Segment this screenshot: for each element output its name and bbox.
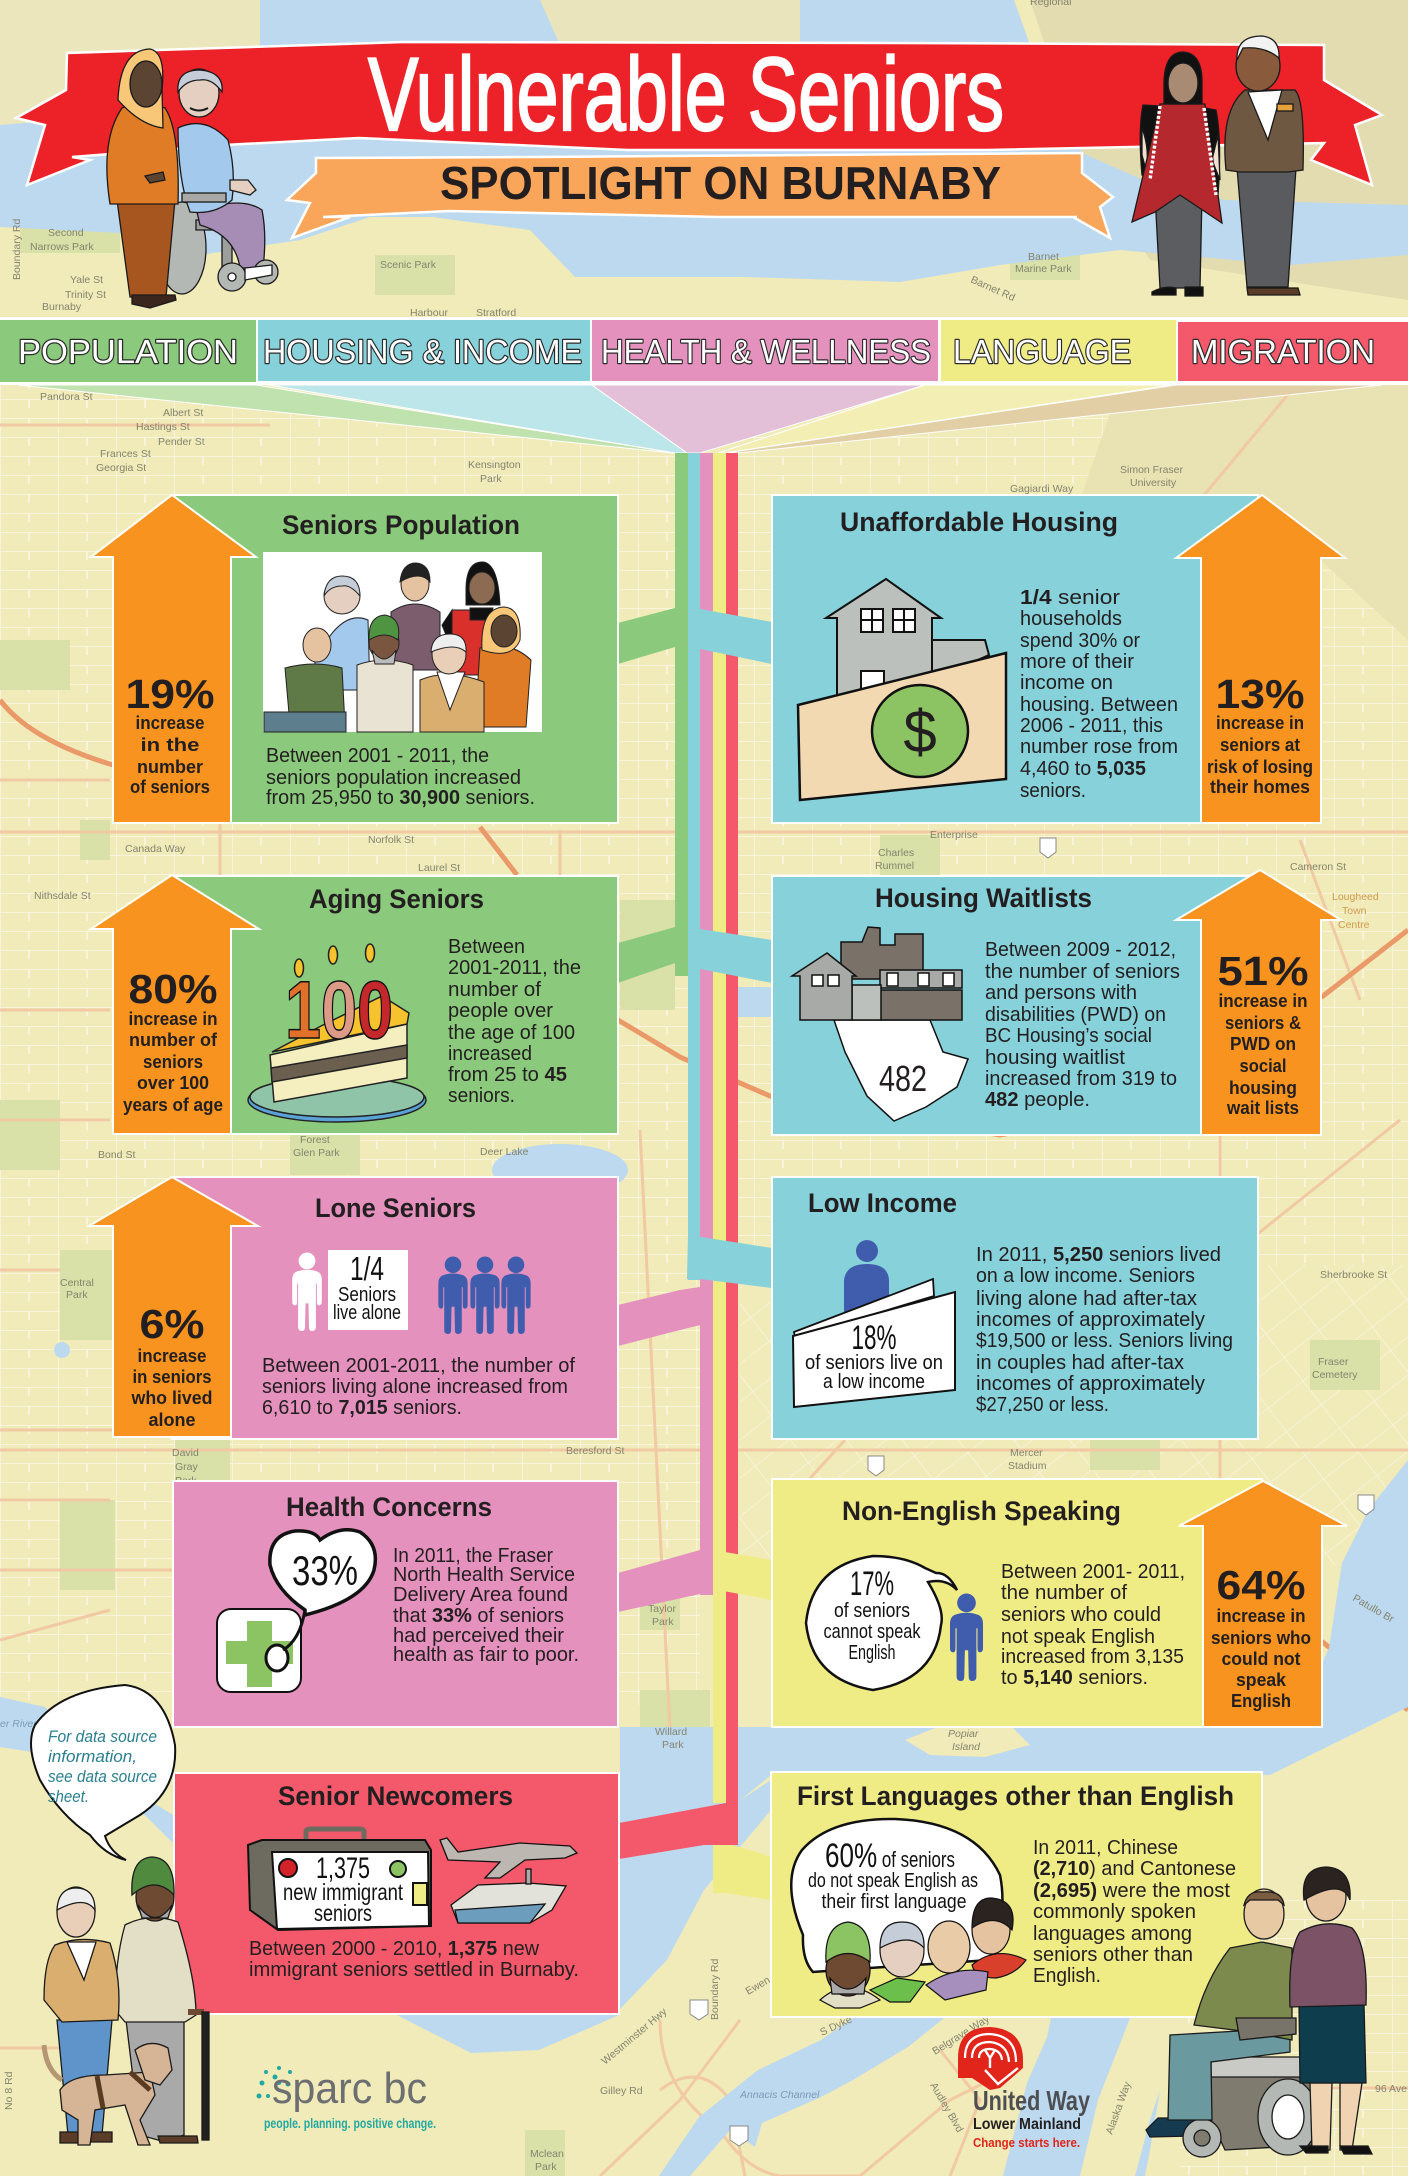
map labels: Lougheed xyxy=(1332,891,1379,903)
tab: population xyxy=(0,320,256,382)
map labels: Sherbrooke St xyxy=(1320,1269,1387,1281)
map labels: Barnet Rd xyxy=(969,274,1017,304)
timeline columns xyxy=(675,453,738,1845)
map labels: Gray xyxy=(175,1461,199,1473)
body text: seniors. xyxy=(448,1084,515,1107)
body text: increased from 319 to xyxy=(985,1067,1177,1090)
icon: person with wallet xyxy=(793,1240,955,1407)
body text: (2,695) were the most xyxy=(1033,1879,1230,1902)
body text xyxy=(266,744,535,809)
arrow stat: 19%: 19% xyxy=(126,671,214,717)
map labels: Barnet xyxy=(1028,251,1059,263)
map labels: Georgia St xyxy=(96,462,146,474)
panel: low income xyxy=(772,1177,1258,1439)
tab: migration: MIGRATION xyxy=(1191,333,1375,370)
body text: income on xyxy=(1020,671,1113,694)
arrow stat: 6%: in seniors xyxy=(132,1366,212,1387)
body text: number of xyxy=(448,978,541,1001)
logo: sparc bc: people. planning. positive change. xyxy=(264,2115,436,2131)
body text: increased xyxy=(448,1042,532,1065)
body text: In 2011, 5,250 seniors lived xyxy=(976,1243,1221,1266)
map labels: Stratford xyxy=(476,307,516,319)
arrow stat: 6%: increase xyxy=(138,1345,206,1366)
icon: buildings and waitlist paper xyxy=(792,927,968,1121)
body text: 2001-2011, the xyxy=(448,956,581,979)
panel: housing waitlists xyxy=(772,876,1258,1135)
arrow stat: 80%: increase in xyxy=(128,1008,218,1029)
map labels: Nithsdale St xyxy=(34,890,91,902)
illustration: birthday cake: 100 xyxy=(285,965,393,1056)
heading: Senior Newcomers xyxy=(278,1781,513,1811)
map labels: Annacis Channel xyxy=(739,2089,820,2101)
tab: health and wellness: HEALTH & WELLNESS xyxy=(601,333,931,370)
figure: woman in wheelchair xyxy=(158,69,278,294)
arrow stat: 13%: 13% xyxy=(1216,671,1304,717)
map labels: Trinity St xyxy=(65,289,106,301)
map labels: Enterprise xyxy=(930,829,978,841)
map labels: Taylor xyxy=(648,1603,677,1615)
map labels: Island xyxy=(952,1741,981,1753)
highway xyxy=(0,700,1408,1710)
arrow stat: 19% xyxy=(91,495,256,823)
callout: 60% speech bubble with faces xyxy=(791,1819,1026,2008)
arrow stat: 64%: English xyxy=(1231,1690,1291,1711)
map labels: Norfolk St xyxy=(368,834,414,846)
map labels: Canada Way xyxy=(125,843,186,855)
heading: Seniors Population xyxy=(282,510,520,540)
panel: seniors population xyxy=(172,495,618,823)
map labels: S Dyke xyxy=(818,2013,854,2039)
body text: seniors. xyxy=(1020,779,1086,802)
body text xyxy=(976,1243,1233,1416)
map labels: Central xyxy=(60,1277,94,1289)
heading: Health Concerns xyxy=(286,1492,492,1522)
tab: health and wellness xyxy=(592,320,938,381)
tab: language xyxy=(941,320,1176,381)
body text: incomes of approximately xyxy=(976,1308,1206,1331)
map labels: Glen Park xyxy=(293,1147,340,1159)
body text: Between 2001- 2011, xyxy=(1001,1560,1185,1583)
map labels: Popiar xyxy=(948,1728,979,1740)
arrow stat: 6%: 6% xyxy=(140,1301,204,1347)
map labels: Belgrave Way xyxy=(930,2013,992,2058)
arrow stat: 51%: wait lists xyxy=(1226,1097,1299,1118)
body text: 4,460 to 5,035 xyxy=(1020,757,1146,780)
category tabs xyxy=(0,317,1408,385)
map labels: Willard xyxy=(655,1726,687,1738)
tab: population: POPULATION xyxy=(18,333,238,370)
callout: 1/4 seniors live alone: 1/4 xyxy=(350,1250,384,1287)
body text: from 25 to 45 xyxy=(448,1063,567,1086)
body text: In 2011, the Fraser xyxy=(393,1544,553,1567)
heading: Housing Waitlists xyxy=(875,883,1092,913)
figure: man in powered wheelchair xyxy=(1146,1889,1318,2157)
arrow stat: 19%: increase xyxy=(136,712,204,733)
map labels: David xyxy=(172,1447,199,1459)
map labels: Fraser xyxy=(1318,1356,1349,1368)
icon: white person xyxy=(292,1252,322,1331)
body text: Between 2001-2011, the number of xyxy=(262,1354,575,1377)
arrow stat: 13%: risk of losing xyxy=(1207,756,1313,777)
callout: 1/4 seniors live alone xyxy=(328,1250,408,1330)
body text: $19,500 or less. Seniors living xyxy=(976,1329,1233,1352)
panel: first languages other than English xyxy=(771,1772,1262,2017)
callout: 33% heart: 33% xyxy=(292,1547,358,1594)
body text xyxy=(262,1354,575,1419)
icon: blue person xyxy=(950,1594,983,1681)
body text: seniors living alone increased from xyxy=(262,1375,568,1398)
arrow stat: 64%: seniors who xyxy=(1211,1627,1311,1648)
panel: aging seniors xyxy=(172,876,618,1134)
body text: seniors other than xyxy=(1033,1943,1193,1966)
map labels: Burnaby xyxy=(42,301,82,313)
body text: commonly spoken xyxy=(1033,1900,1196,1923)
body text: housing waitlist xyxy=(985,1046,1125,1069)
arrow stat: 51%: social xyxy=(1240,1055,1286,1076)
map labels: Park xyxy=(662,1739,684,1751)
arrow stat: 13%: seniors at xyxy=(1220,734,1300,755)
figure: man in brown cardigan xyxy=(1225,36,1303,295)
body text xyxy=(448,935,581,1107)
tab: migration xyxy=(1178,322,1408,381)
heading: Non-English Speaking xyxy=(842,1496,1121,1526)
arrow stat: 80%: years of age xyxy=(123,1094,223,1115)
icon: suitcase: 1,375 xyxy=(316,1852,370,1885)
body text: North Health Service xyxy=(393,1563,575,1586)
panel: lone seniors xyxy=(172,1177,618,1439)
body text xyxy=(249,1937,579,1981)
icon: suitcase xyxy=(248,1829,431,1930)
map labels: Harbour xyxy=(410,307,448,319)
map labels: Narrows Park xyxy=(30,241,94,253)
map labels: Hastings St xyxy=(136,421,190,433)
callout: 1/4 seniors live alone: live alone xyxy=(333,1302,401,1324)
heading: Low Income xyxy=(808,1188,957,1218)
map labels: Boundary Rd xyxy=(709,1959,721,2020)
map labels: Yale St xyxy=(70,274,103,286)
map labels: No 8 Rd xyxy=(3,2071,15,2110)
body text: living alone had after-tax xyxy=(976,1287,1198,1310)
body text: on a low income. Seniors xyxy=(976,1264,1195,1287)
map labels: Rummel xyxy=(875,860,914,872)
figure: woman in purple sweater xyxy=(1290,1867,1372,2154)
main title: Vulnerable Seniors xyxy=(368,37,1004,153)
callout: 60% speech bubble with faces: do not speak English as xyxy=(808,1870,978,1892)
body text: seniors who could xyxy=(1001,1603,1161,1626)
map labels: Town xyxy=(1342,905,1367,917)
arrow stat: 80%: 80% xyxy=(128,966,218,1012)
arrow stat: 51%: housing xyxy=(1229,1077,1297,1098)
body text xyxy=(1001,1560,1185,1689)
map labels: er River xyxy=(0,1718,37,1730)
callout: data source speech bubble: For data source xyxy=(48,1727,157,1746)
map labels: Deer Lake xyxy=(480,1146,529,1158)
panel: health concerns xyxy=(173,1481,618,1727)
body text: incomes of approximately xyxy=(976,1372,1206,1395)
subtitle text: SPOTLIGHT ON BURNABY xyxy=(440,157,1001,209)
body text: 2006 - 2011, this xyxy=(1020,714,1163,737)
map labels: Park xyxy=(480,473,502,485)
body text xyxy=(393,1544,579,1666)
icon: house in wallet with dollar sign xyxy=(798,579,1006,800)
map labels: Park xyxy=(652,1616,674,1628)
panel: non-English speaking xyxy=(772,1479,1262,1727)
map labels: Gilley Rd xyxy=(600,2085,643,2097)
body text: the number of xyxy=(1001,1581,1127,1604)
arrow stat: 6%: alone xyxy=(148,1409,196,1430)
tab: language: LANGUAGE xyxy=(953,333,1131,370)
arrow stat: 13%: increase in xyxy=(1216,712,1304,733)
body text: In 2011, Chinese xyxy=(1033,1836,1178,1859)
map labels: Bond St xyxy=(98,1149,135,1161)
logo: United Way: Lower Mainland xyxy=(973,2116,1081,2133)
map labels: Scenic Park xyxy=(380,259,437,271)
arrow stat: 19%: number xyxy=(137,756,203,777)
arrow stat: 51%: increase in xyxy=(1218,990,1308,1011)
icon: person with wallet: 18% xyxy=(852,1319,896,1357)
icon: buildings and waitlist paper: 482 xyxy=(879,1058,927,1099)
arrow stat: 80%: seniors xyxy=(143,1051,203,1072)
body text: languages among xyxy=(1033,1922,1192,1945)
icon: person with wallet: of seniors live on xyxy=(805,1352,943,1374)
arrow stat: 64%: increase in xyxy=(1216,1605,1306,1626)
map labels: Kensington xyxy=(468,459,521,471)
callout: 60% speech bubble with faces: 60% of seniors xyxy=(825,1837,955,1875)
arrow stat: 51% xyxy=(1176,870,1341,1135)
map labels: Laurel St xyxy=(418,862,460,874)
popiar island xyxy=(905,1722,1030,1757)
logo: United Way: Change starts here. xyxy=(973,2135,1080,2150)
body text: BC Housing’s social xyxy=(985,1024,1152,1047)
body text: and persons with xyxy=(985,981,1137,1004)
body text: 482 people. xyxy=(985,1088,1090,1111)
guide dog xyxy=(44,2043,172,2145)
map labels: University xyxy=(1130,477,1177,489)
body text xyxy=(1033,1836,1236,1987)
map labels: Beresford St xyxy=(566,1445,624,1457)
body text: disabilities (PWD) on xyxy=(985,1003,1166,1026)
map labels: Mclean xyxy=(530,2148,564,2160)
icon: airplane xyxy=(440,1838,577,1878)
connectors from panels to columns xyxy=(618,608,772,1900)
funnel wedges into timeline xyxy=(18,385,1382,453)
body text: the number of seniors xyxy=(985,960,1180,983)
red ribbon xyxy=(16,42,1382,185)
panel: unaffordable housing xyxy=(772,495,1258,823)
body text: not speak English xyxy=(1001,1625,1155,1648)
callout: data source speech bubble: sheet. xyxy=(48,1787,89,1806)
body text xyxy=(985,938,1180,1111)
map labels: Marine Park xyxy=(1015,263,1072,275)
subtitle ribbon xyxy=(287,153,1113,238)
arrow stat: 64%: 64% xyxy=(1216,1562,1306,1608)
body text: housing. Between xyxy=(1020,693,1178,716)
map labels: Park xyxy=(175,1475,197,1487)
map labels: Albert St xyxy=(163,407,203,419)
callout: 33% heart xyxy=(270,1530,375,1615)
map labels: Frances St xyxy=(100,448,151,460)
arrow stat: 80%: number of xyxy=(129,1029,218,1050)
body text: people over xyxy=(448,999,553,1022)
logo: sparc bc: sparc bc xyxy=(272,2064,427,2113)
body text: more of their xyxy=(1020,650,1134,673)
body text: English. xyxy=(1033,1964,1101,1987)
arrow stat: 13% xyxy=(1176,495,1345,823)
body text: from 25,950 to 30,900 seniors. xyxy=(266,786,535,809)
callout: 60% speech bubble with faces: their first language xyxy=(822,1891,966,1913)
illustration: group of seniors xyxy=(263,552,542,732)
icon: house in wallet with dollar sign: $ xyxy=(903,698,937,765)
logo: United Way xyxy=(958,2027,1090,2150)
map labels: Charles xyxy=(878,847,914,859)
map labels: 96 Ave xyxy=(1375,2083,1407,2095)
icon: suitcase: new immigrant xyxy=(283,1879,403,1905)
map labels: Stadium xyxy=(1008,1460,1047,1472)
callout: 17% speech bubble: 17% xyxy=(850,1565,894,1603)
callout: data source speech bubble: information, xyxy=(48,1747,137,1766)
body text: health as fair to poor. xyxy=(393,1643,579,1666)
body text: Between 2000 - 2010, 1,375 new xyxy=(249,1937,539,1960)
figure: woman in hijab xyxy=(107,49,178,308)
top banner: title xyxy=(16,37,1382,185)
body text xyxy=(1020,586,1178,802)
icon: suitcase: seniors xyxy=(314,1900,372,1926)
map labels: Patullo Br xyxy=(1350,1592,1396,1626)
callout: 17% speech bubble xyxy=(806,1556,957,1690)
body text: $27,250 or less. xyxy=(976,1393,1109,1416)
body text: that 33% of seniors xyxy=(393,1604,564,1627)
body text: spend 30% or xyxy=(1020,629,1140,652)
arrow stat: 19%: of seniors xyxy=(130,776,210,797)
body text: 1/4 senior xyxy=(1020,586,1120,609)
logo: United Way: United Way xyxy=(973,2085,1090,2116)
map labels: Audley Blvd xyxy=(927,2080,966,2135)
callout: data source speech bubble: see data source xyxy=(48,1767,157,1786)
arrow stat: 6%: who lived xyxy=(131,1387,212,1408)
arrow stat: 64%: speak xyxy=(1236,1669,1287,1690)
highway shields xyxy=(690,838,1374,2146)
map labels: Park xyxy=(535,2161,557,2173)
heading: Lone Seniors xyxy=(315,1193,476,1223)
body text: immigrant seniors settled in Burnaby. xyxy=(249,1958,579,1981)
map labels: Mercer xyxy=(1010,1447,1043,1459)
heading: First Languages other than English xyxy=(797,1781,1234,1811)
map labels: Ewen xyxy=(744,1974,772,1998)
illustration: birthday cake xyxy=(248,944,426,1122)
heading: Unaffordable Housing xyxy=(840,507,1118,537)
arrow stat: 51%: 51% xyxy=(1218,948,1308,994)
body text: in couples had after-tax xyxy=(976,1351,1185,1374)
body text: to 5,140 seniors. xyxy=(1001,1666,1148,1689)
map labels: Pender St xyxy=(158,436,205,448)
callout: 1/4 seniors live alone: Seniors xyxy=(338,1284,396,1306)
map labels: Gagiardi Way xyxy=(1010,483,1074,495)
map labels: Cameron St xyxy=(1290,861,1346,873)
figure: man with guide dog xyxy=(44,1887,172,2145)
icon: person with wallet: a low income xyxy=(823,1371,925,1393)
map labels: Westminster Hwy xyxy=(599,2005,670,2067)
arrow stat: 64%: could not xyxy=(1222,1648,1300,1669)
tab: housing and income xyxy=(258,320,590,381)
figure: man in turban with cane xyxy=(115,1857,209,2143)
logo: sparc bc xyxy=(256,2064,436,2131)
arrow stat: 6% xyxy=(89,1177,258,1437)
map labels: Park xyxy=(66,1289,88,1301)
body text: Between 2009 - 2012, xyxy=(985,938,1176,961)
body text: had perceived their xyxy=(393,1624,564,1647)
body text: seniors population increased xyxy=(266,766,521,789)
body text: the age of 100 xyxy=(448,1021,575,1044)
arrow stat: 51%: PWD on xyxy=(1230,1033,1296,1054)
callout: 17% speech bubble: of seniors xyxy=(834,1600,910,1622)
panel: senior newcomers xyxy=(174,1773,619,2014)
arrow stat: 80%: over 100 xyxy=(137,1072,209,1093)
body text: increased from 3,135 xyxy=(1001,1645,1184,1668)
body text: Between 2001 - 2011, the xyxy=(266,744,489,767)
arrow stat: 80% xyxy=(91,875,259,1134)
callout: data source speech bubble xyxy=(31,1685,175,1860)
body text: households xyxy=(1020,607,1122,630)
icon: medical cross with stethoscope xyxy=(217,1609,305,1692)
heading: Aging Seniors xyxy=(309,884,484,914)
body text: 6,610 to 7,015 seniors. xyxy=(262,1396,462,1419)
map labels: Second xyxy=(48,227,84,239)
icon: three blue people xyxy=(438,1256,531,1334)
callout: 17% speech bubble: cannot speak xyxy=(824,1621,921,1643)
arrow stat: 64% xyxy=(1179,1481,1347,1727)
map labels: Boundary Rd xyxy=(11,219,23,280)
map labels: Simon Fraser xyxy=(1120,464,1184,476)
arrow stat: 19%: in the xyxy=(140,734,200,755)
map labels: Pandora St xyxy=(40,391,93,403)
body text: number rose from xyxy=(1020,735,1178,758)
body text: Delivery Area found xyxy=(393,1583,568,1606)
arrow stat: 13%: their homes xyxy=(1210,776,1310,797)
arrow stat: 51%: seniors & xyxy=(1225,1012,1301,1033)
map labels: Cemetery xyxy=(1312,1369,1358,1381)
map labels: Centre xyxy=(1338,919,1370,931)
callout: 17% speech bubble: English xyxy=(848,1642,896,1664)
figure: woman in red vest xyxy=(1132,52,1222,296)
map labels: Alaska Way xyxy=(1104,2079,1134,2136)
icon: ship xyxy=(451,1869,566,1923)
body text: (2,710) and Cantonese xyxy=(1033,1857,1236,1880)
map labels: Forest xyxy=(300,1134,330,1146)
body text: Between xyxy=(448,935,525,958)
tab: housing and income: HOUSING & INCOME xyxy=(263,333,582,370)
